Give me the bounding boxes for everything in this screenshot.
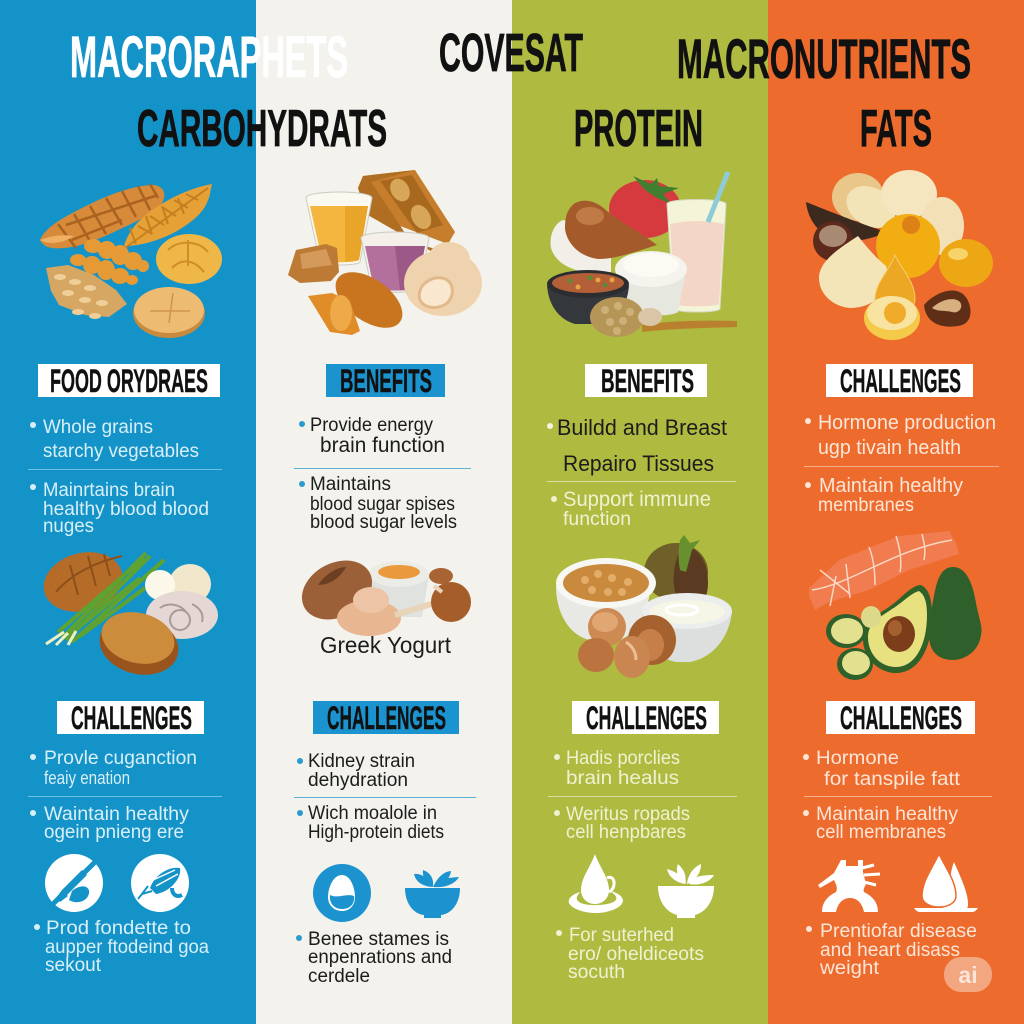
text block: column two upper bullets	[294, 415, 471, 533]
text block: column one upper bullets: healthy blood blood	[43, 499, 209, 520]
section label: challenges column three	[572, 700, 719, 736]
text block: column three footer bullet: socuth	[568, 962, 625, 983]
text block: column three footer bullet	[556, 925, 704, 983]
illustration: protein foods and shake	[547, 172, 737, 337]
illustration: bread, chives and mushrooms	[37, 544, 218, 683]
text block: column one challenges bullets: Provle cuganction	[44, 748, 197, 769]
text block: column three upper bullets	[547, 415, 736, 530]
text block: column one challenges bullets	[28, 748, 222, 843]
text block: column one upper bullets: Mainrtains brain	[43, 480, 175, 501]
text block: column three upper bullets: Buildd and Breast	[557, 415, 727, 440]
text block: column four footer bullet: weight	[819, 958, 880, 979]
icon: water drop on dish	[569, 854, 623, 913]
text block: column one footer bullet: sekout	[45, 955, 102, 976]
section label: challenges column two: CHALLENGES	[327, 700, 446, 736]
title row	[70, 23, 971, 90]
text block: column four footer bullet	[806, 921, 977, 979]
column headings: CARBOHYDRATS	[137, 100, 387, 158]
icon: white body figure	[818, 860, 880, 912]
section label: benefits protein: BENEFITS	[601, 363, 694, 399]
text block: column four challenges bullets: Maintain healthy	[816, 804, 959, 825]
text block: column one upper bullets: starchy vegetables	[43, 441, 199, 462]
caption: greek yogurt: Greek Yogurt	[320, 632, 452, 658]
section label: food orydraes: FOOD ORYDRAES	[50, 363, 208, 399]
text block: column one upper bullets: Whole grains	[43, 417, 153, 438]
text block: column four footer bullet: and heart disass	[820, 940, 960, 961]
text block: column three challenges bullets: cell henpbares	[566, 822, 686, 843]
column headings: PROTEIN	[574, 100, 703, 158]
text block: column two challenges bullets: High-protein diets	[308, 822, 444, 843]
panel: fats column	[768, 0, 1024, 1024]
text block: column four challenges bullets: cell membranes	[816, 822, 946, 843]
panel: carbohydrates sources column	[0, 0, 256, 1024]
badge: ai watermark	[944, 957, 992, 992]
text block: column one footer bullet: aupper ftodeind goa	[45, 937, 209, 958]
text block: column two challenges bullets: Wich moalole in	[308, 803, 437, 824]
text block: column one footer bullet: Prod fondette to	[46, 918, 191, 939]
badge: ai watermark: ai	[958, 962, 978, 988]
title row: MACRORAPHETS	[70, 25, 348, 90]
panel: carbohydrates benefits column	[256, 0, 512, 1024]
text block: column two challenges bullets: dehydration	[308, 770, 408, 791]
text block: column four challenges bullets	[803, 748, 992, 843]
text block: column three challenges bullets: Weritus ropads	[566, 804, 690, 825]
text block: column three upper bullets: function	[563, 509, 631, 530]
text block: column four upper bullets: Maintain healthy	[819, 475, 963, 497]
text block: column three challenges bullets: Hadis porclies	[566, 748, 680, 769]
section label: challenges column one: CHALLENGES	[71, 700, 192, 736]
icon: blue bowl with leaves	[405, 870, 460, 918]
section label: challenges column four	[826, 700, 975, 736]
text block: column two footer bullet	[296, 929, 452, 987]
text block: column four upper bullets: membranes	[818, 495, 914, 516]
text block: column two challenges bullets	[294, 751, 476, 843]
text block: column two upper bullets: blood sugar levels	[310, 512, 457, 533]
section label: benefits protein	[585, 363, 707, 399]
column headings	[137, 100, 932, 158]
section label: challenges fats	[826, 363, 973, 399]
illustration: beans, fig, yogurt and nuts	[556, 535, 732, 678]
illustration: breads and grains	[40, 184, 222, 338]
text block: column one upper bullets: nuges	[43, 516, 94, 537]
section label: challenges column two	[313, 700, 459, 736]
illustration: meats and yogurt cup	[292, 549, 471, 636]
section label: benefits carbohydrates: BENEFITS	[340, 363, 432, 399]
text block: column four challenges bullets: for tanspile fatt	[824, 769, 961, 790]
icon: grain pod circle	[131, 854, 189, 912]
text block: column one challenges bullets: Waintain healthy	[44, 804, 190, 825]
icon: blue circle with egg	[313, 864, 371, 922]
icon: white bowl with leaves	[658, 864, 714, 918]
text block: column two upper bullets: Provide energy	[310, 415, 433, 436]
text block: column one challenges bullets: feaiy enation	[44, 768, 130, 788]
icon: white oil drops	[914, 854, 978, 912]
text block: column one challenges bullets: ogein pnieng ere	[44, 822, 184, 843]
text block: column two footer bullet: cerdele	[308, 966, 370, 987]
section label: challenges column three: CHALLENGES	[586, 700, 707, 736]
text block: column three upper bullets: Support immune	[563, 488, 711, 511]
text block: column three footer bullet: For suterhed	[569, 925, 674, 946]
text block: column four upper bullets: ugp tivain health	[818, 437, 961, 459]
text block: column four footer bullet: Prentiofar disease	[820, 921, 977, 942]
text block: column four upper bullets	[804, 412, 999, 516]
text block: column one upper bullets	[28, 417, 222, 537]
text block: column four upper bullets: Hormone production	[818, 412, 996, 434]
illustration: fat-rich foods	[806, 170, 993, 340]
text block: column one footer bullet	[34, 918, 209, 976]
text block: column two footer bullet: enpenrations and	[308, 947, 452, 968]
text block: column three upper bullets: Repairo Tissues	[563, 451, 714, 476]
section label: benefits carbohydrates	[326, 363, 445, 399]
text block: column two upper bullets: blood sugar spises	[310, 494, 455, 515]
title row: COVESAT	[439, 23, 583, 83]
icon: crossed food circle	[45, 854, 103, 912]
section label: challenges column one	[57, 700, 204, 736]
text block: column two upper bullets: brain function	[320, 434, 445, 457]
section label: food orydraes	[38, 363, 220, 399]
text block: column three challenges bullets	[548, 748, 737, 843]
illustration: carbohydrate foods and drinks	[288, 170, 482, 339]
text block: column three footer bullet: ero/ oheldiceots	[568, 944, 704, 965]
text block: column four challenges bullets: Hormone	[816, 748, 899, 769]
text block: column two challenges bullets: Kidney strain	[308, 751, 415, 772]
text block: column three challenges bullets: brain healus	[566, 768, 679, 789]
text block: column two upper bullets: Maintains	[310, 474, 391, 495]
column headings: FATS	[860, 100, 932, 158]
text block: column two footer bullet: Benee stames is	[308, 929, 449, 950]
panel: protein column	[512, 0, 768, 1024]
illustration: salmon and avocado	[809, 531, 982, 680]
